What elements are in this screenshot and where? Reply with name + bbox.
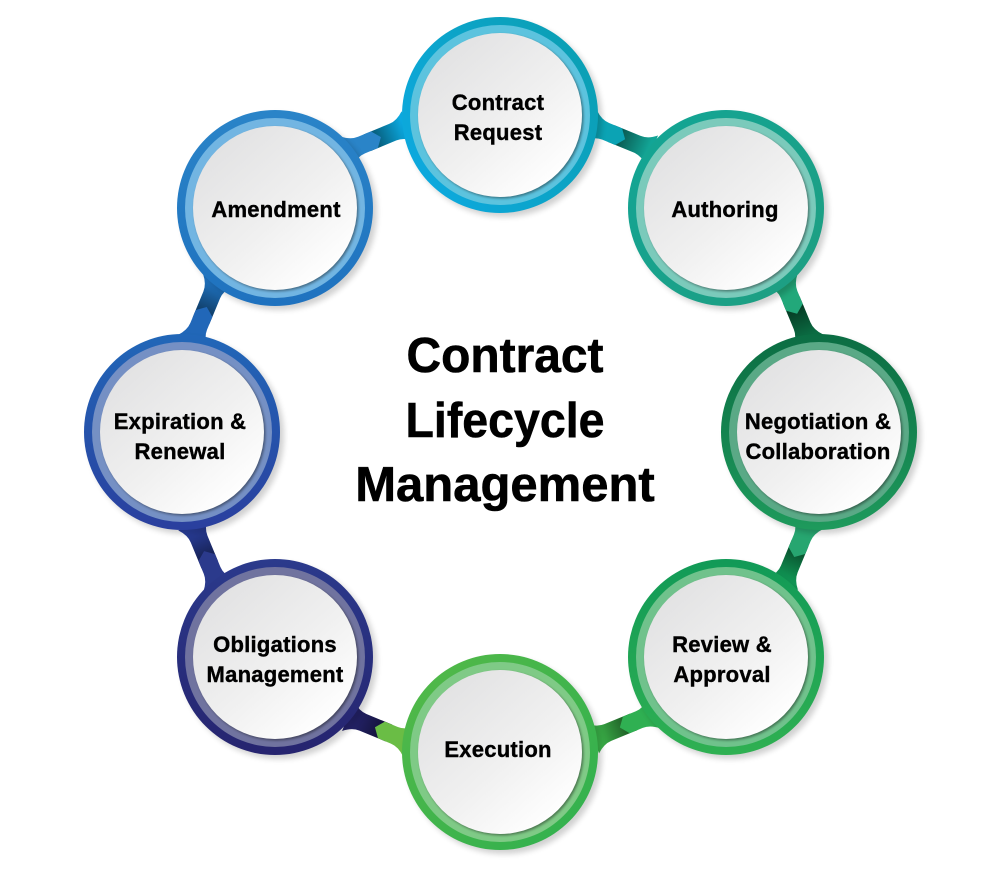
connector: Review to Execution [587, 699, 660, 753]
node: Amendment: Amendment [211, 197, 341, 222]
node: Obligations Management: Obligations [213, 632, 337, 657]
node: Review & Approval: Review & [672, 632, 772, 657]
node: Obligations Management: Management [207, 662, 344, 687]
node: Obligations Management [177, 559, 377, 759]
node: Review & Approval [628, 559, 828, 759]
node: Negotiation & Collaboration [721, 334, 921, 534]
node: Contract Request: Contract [452, 90, 545, 115]
connector: Expiration to Amendment [178, 274, 233, 347]
connector: Contract Request to Authoring [585, 110, 658, 165]
connector: Negotiation to Review [768, 517, 823, 590]
node: Expiration & Renewal: Expiration & [114, 409, 246, 434]
connector: Amendment to Contract Request [341, 111, 414, 166]
connector: Execution to Obligations [342, 701, 415, 756]
title [355, 329, 655, 512]
node: Expiration & Renewal: Renewal [134, 439, 226, 464]
node: Negotiation & Collaboration: Negotiation & [745, 409, 891, 434]
node: Authoring [628, 110, 828, 310]
title: Lifecycle [406, 394, 604, 448]
node: Review & Approval: Approval [673, 662, 771, 687]
node: Execution [402, 654, 602, 854]
node: Execution: Execution [444, 737, 552, 762]
connector: Obligations to Expiration [178, 518, 233, 591]
node: Contract Request: Request [454, 120, 543, 145]
connector: Authoring to Negotiation [768, 273, 823, 347]
title: Management [355, 458, 655, 512]
node: Expiration & Renewal [84, 334, 284, 534]
node: Authoring: Authoring [671, 197, 779, 222]
node: Contract Request [402, 17, 602, 217]
node: Negotiation & Collaboration: Collaboration [745, 439, 891, 464]
node: Amendment [177, 110, 377, 310]
title: Contract [406, 329, 604, 383]
